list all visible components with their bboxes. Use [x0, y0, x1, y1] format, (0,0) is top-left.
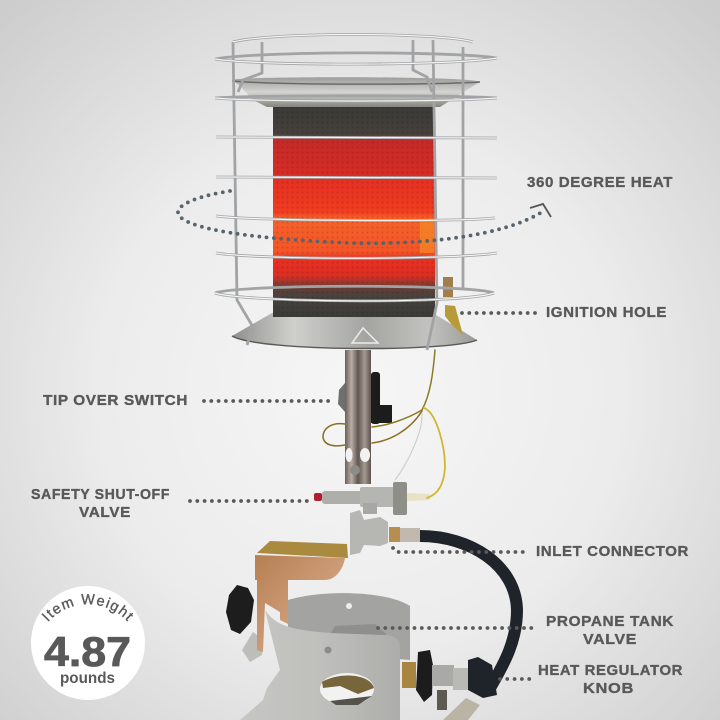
black knob — [226, 585, 254, 634]
360 degree heat rotation arrow — [178, 191, 551, 243]
stem pipe — [345, 350, 371, 484]
label: heat regulator knob: HEAT REGULATOR — [538, 662, 683, 679]
chrome guard cage — [215, 34, 497, 350]
tank collar — [240, 593, 410, 720]
cage highlight strokes — [215, 34, 497, 301]
cage shadow strokes — [215, 34, 497, 350]
inlet valve — [350, 510, 420, 555]
label: 360 degree heat: 360 DEGREE HEAT — [527, 174, 673, 191]
tip over switch — [338, 372, 392, 424]
label: propane tank valve — [546, 613, 674, 648]
regulator — [402, 650, 497, 720]
label: propane tank valve: PROPANE TANK — [546, 613, 674, 630]
leader: propane tank valve — [378, 626, 536, 630]
label: heat regulator knob: KNOB — [583, 680, 634, 697]
label: tip over switch: TIP OVER SWITCH — [43, 392, 188, 409]
copper bracket — [255, 541, 348, 652]
item weight badge — [31, 586, 145, 700]
heater illustration — [215, 34, 517, 720]
label: ignition hole: IGNITION HOLE — [546, 304, 667, 321]
leader: safety shut-off valve — [190, 499, 312, 503]
label: safety shut-off valve: SAFETY SHUT-OFF — [31, 486, 170, 503]
base dish — [232, 313, 477, 349]
safety shut-off valve — [314, 482, 430, 515]
label: inlet connector: INLET CONNECTOR — [536, 543, 689, 560]
heating element — [273, 107, 435, 317]
leader: ignition hole — [462, 311, 538, 315]
top reflector plate — [232, 77, 480, 107]
label: heat regulator knob — [538, 662, 683, 697]
leader: inlet connector — [393, 548, 528, 552]
item weight badge: pounds — [60, 670, 115, 687]
item weight badge: 4.87 — [44, 628, 131, 675]
leader: tip over switch — [204, 399, 333, 403]
label: safety shut-off valve: VALVE — [79, 504, 131, 521]
item weight badge: Item Weight — [41, 594, 134, 622]
ignition tube — [443, 277, 463, 335]
wires — [323, 350, 445, 498]
hose — [420, 536, 517, 690]
leader: heat regulator knob — [500, 677, 530, 681]
label: propane tank valve: VALVE — [583, 631, 637, 648]
label: safety shut-off valve — [31, 486, 170, 521]
